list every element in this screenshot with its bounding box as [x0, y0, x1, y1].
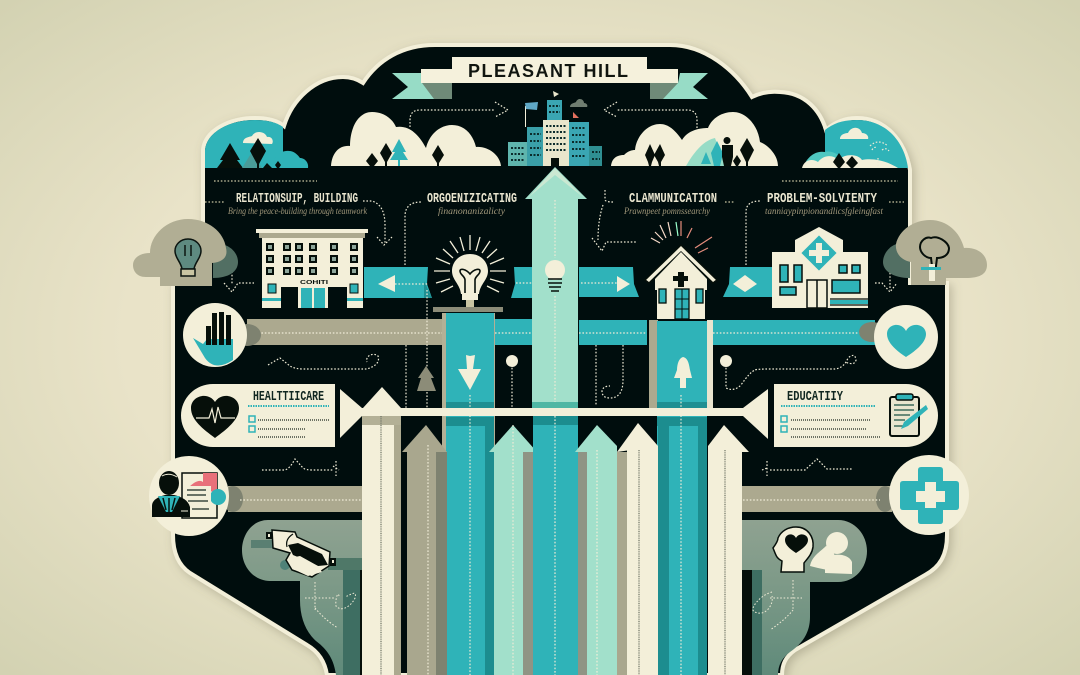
band dotted lines: [258, 332, 866, 334]
title banner: [392, 57, 708, 99]
cross circle: [889, 455, 969, 535]
cream arrow right: [708, 425, 749, 675]
mint arrow right: [575, 425, 617, 675]
dashed squiggles: [262, 354, 856, 476]
dashed arrow from cloud to city: [604, 102, 697, 128]
icon: handshake: [251, 530, 362, 577]
title text: PLEASANT HILL: [468, 61, 628, 81]
horizontal band row: teal: [495, 319, 875, 345]
icon: bell arrow: [674, 357, 692, 388]
gray band lower right: [742, 486, 894, 512]
right cloud with key icon: [883, 220, 987, 285]
person circle: [149, 456, 229, 536]
left cloud with trees: [331, 112, 501, 166]
icon: people: [810, 532, 852, 574]
lightbulb icon: [434, 235, 506, 307]
main dark panel: [173, 45, 947, 675]
heading: relationship building: RELATIONSUIP, BUILDING: [236, 191, 358, 207]
left cloud with bulb icon: [133, 219, 238, 286]
building icon: [256, 229, 368, 308]
mint arrow left: [489, 425, 537, 675]
education card: [774, 384, 938, 447]
heading: relationship building: [205, 181, 368, 217]
building icon: COHITI: [300, 280, 329, 286]
icon: bulb in arrow: [545, 260, 565, 291]
left landscape dome: [205, 120, 308, 168]
heading: organizing: [427, 191, 517, 217]
city skyline: [508, 91, 602, 166]
healthcare card: [181, 384, 335, 447]
right ribbon: [650, 73, 708, 99]
house icon: [645, 221, 717, 319]
teal arrow block: bulb right: [511, 267, 532, 298]
teal arrow block: house left: [579, 267, 639, 297]
teal column center: [533, 416, 578, 675]
gray arrow: [402, 425, 447, 675]
dot marker: left: [506, 355, 518, 367]
cream arrow center-right: [617, 423, 658, 675]
hand circle: [183, 303, 261, 367]
heading: problem solving: [765, 181, 904, 217]
central mint arrow: [525, 167, 587, 408]
heart circle: [859, 305, 938, 369]
teal arrow block: hospital left: [723, 267, 772, 297]
heading: problem solving: PROBLEM-SOLVIENTY: [767, 191, 877, 207]
heading: organizing: finanonanizalicty: [438, 206, 506, 217]
heading: healthcare: HEALTTIICARE: [253, 389, 324, 405]
cream arrow left: [362, 387, 401, 675]
icon: head with heart: [773, 527, 813, 572]
heading: communication: CLAMMUNICATION: [629, 191, 717, 207]
horizontal band row: gray left: [247, 319, 442, 345]
handshake panel: [242, 520, 362, 675]
dashed connectors between headings: [224, 190, 897, 292]
teal arrow block: left: [364, 267, 432, 298]
small gray tree arrow: [417, 366, 436, 391]
dot marker: right: [720, 355, 732, 367]
head and people panel: [742, 520, 867, 675]
heading: education: EDUCATIIY: [787, 389, 843, 405]
right cloud with trees and figure: [611, 112, 778, 166]
heading: communication: Prawnpeet pomnssearchy: [623, 207, 711, 217]
banner strip: [421, 57, 678, 83]
dashed drop lines: [406, 290, 623, 408]
teal pillar left: [433, 307, 503, 675]
heading: organizing: ORGOENIZICATING: [427, 191, 517, 207]
heading: relationship building: Bring the peace-building through teamwork: [228, 207, 368, 217]
teal pillar right: [649, 320, 713, 675]
heading: problem solving: tanniaypinpionandlicsfgleingfast: [765, 206, 883, 217]
heading: communication: [623, 191, 734, 217]
icon: heart pulse: [191, 396, 239, 438]
gray band lower left: [223, 486, 362, 512]
dashed arrow to city: [410, 102, 508, 127]
left ribbon: [392, 73, 452, 99]
icon: down arrow: [458, 355, 481, 390]
right landscape dome: [802, 120, 908, 168]
hospital icon: [772, 227, 868, 308]
icon: clipboard: [890, 394, 928, 436]
horizontal cream bar with arrowheads: [340, 389, 768, 439]
